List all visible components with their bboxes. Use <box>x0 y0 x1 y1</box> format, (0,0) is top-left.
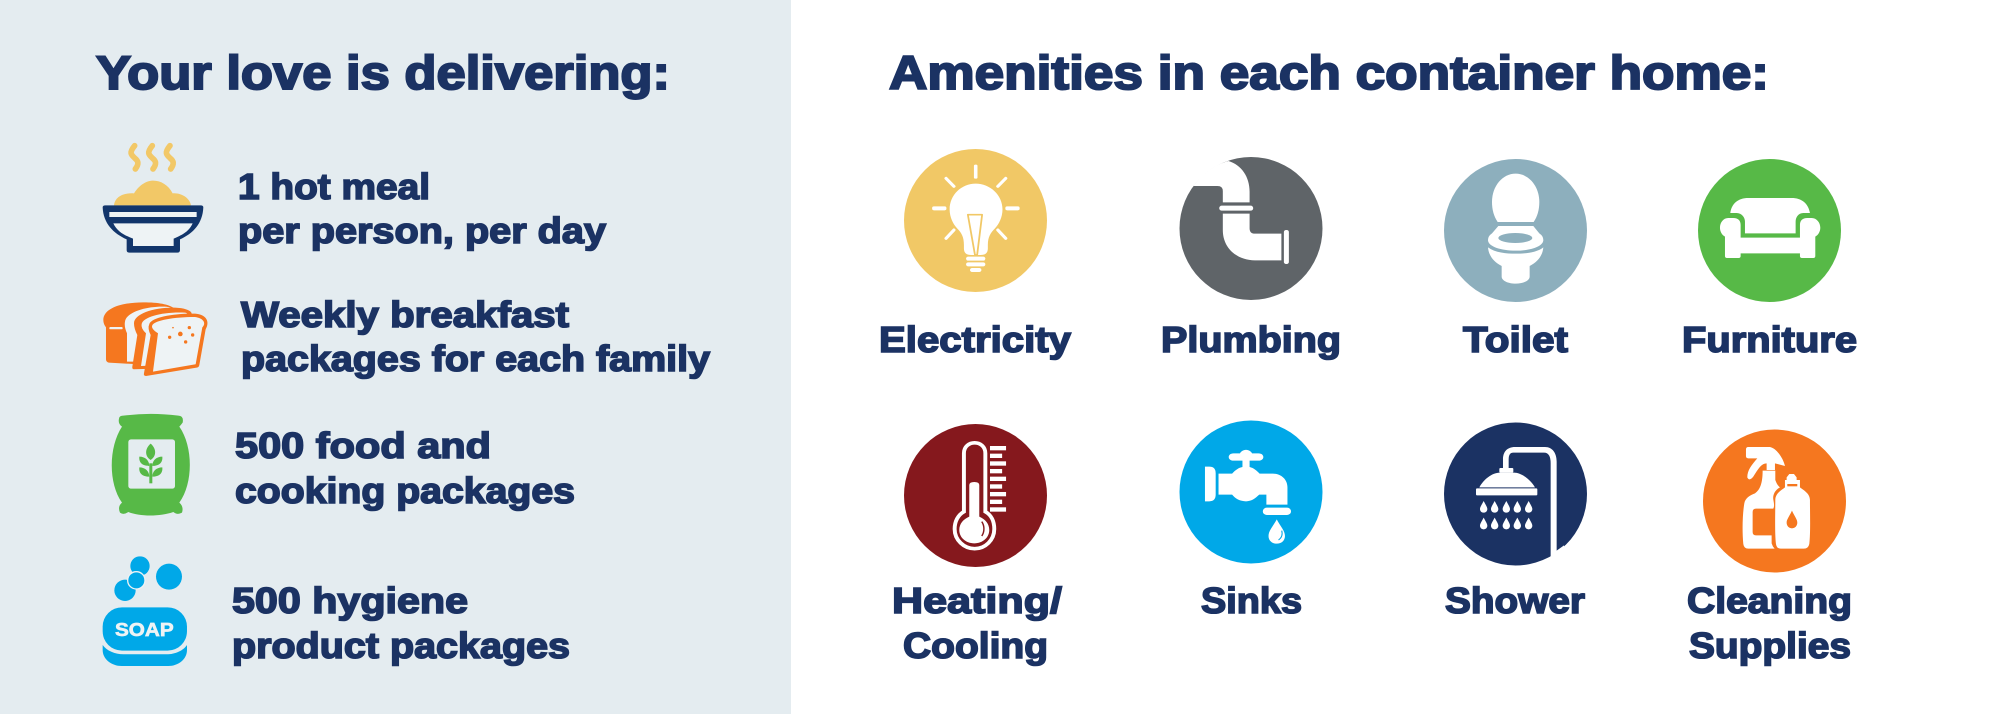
icon: soap bar and bubbles: SOAP <box>115 619 174 640</box>
panel background <box>0 0 791 714</box>
text: weekly breakfast packages: packages for each family <box>241 338 710 379</box>
text: 1 hot meal per person, per day: per person, per day <box>238 210 606 251</box>
label: cleaning supplies <box>1687 580 1852 666</box>
icon: shower <box>1444 422 1587 567</box>
label: heating and cooling: Cooling <box>903 625 1048 666</box>
text: 500 food and cooking packages: 500 food and <box>235 425 491 466</box>
label: heating and cooling: Heating/ <box>892 580 1062 621</box>
icon: heating and cooling thermometer <box>904 424 1047 567</box>
label: furniture: Furniture <box>1682 319 1857 360</box>
label: electricity: Electricity <box>879 319 1071 360</box>
text: 500 food and cooking packages: cooking packages <box>235 470 575 511</box>
icon: sink faucet <box>1180 420 1322 564</box>
icon: plumbing pipe <box>1180 157 1322 300</box>
label: heating and cooling <box>892 580 1062 666</box>
text: 500 food and cooking packages <box>235 425 575 511</box>
label: toilet: Toilet <box>1463 319 1568 360</box>
icon: electricity light bulb <box>904 149 1047 292</box>
icon: bowl of hot food <box>103 146 203 253</box>
heading: amenities in each container home: Amenities in each container home: <box>889 46 1769 99</box>
panel: amenities <box>879 46 1857 666</box>
icon: furniture sofa <box>1698 159 1841 302</box>
text: 1 hot meal per person, per day: 1 hot meal <box>238 166 430 207</box>
text: 500 hygiene product packages <box>232 580 570 666</box>
panel: your love is delivering <box>0 0 791 714</box>
label: cleaning supplies: Supplies <box>1689 625 1851 666</box>
label: sinks: Sinks <box>1201 580 1302 621</box>
text: 500 hygiene product packages: product packages <box>232 625 570 666</box>
icon: toilet <box>1444 159 1587 302</box>
text: 1 hot meal per person, per day <box>238 166 606 251</box>
text: weekly breakfast packages: Weekly breakfast <box>241 294 569 335</box>
label: shower: Shower <box>1445 580 1585 621</box>
icon: soap bar and bubbles <box>103 556 187 666</box>
label: cleaning supplies: Cleaning <box>1687 580 1852 621</box>
icon: sliced bread <box>103 302 207 376</box>
icon: cleaning supplies bottles <box>1703 430 1846 572</box>
label: plumbing: Plumbing <box>1161 319 1341 360</box>
text: weekly breakfast packages <box>241 294 710 379</box>
text: 500 hygiene product packages: 500 hygiene <box>232 580 468 621</box>
icon: green food sack <box>112 414 190 515</box>
heading: your love is delivering: Your love is delivering: <box>96 46 670 99</box>
